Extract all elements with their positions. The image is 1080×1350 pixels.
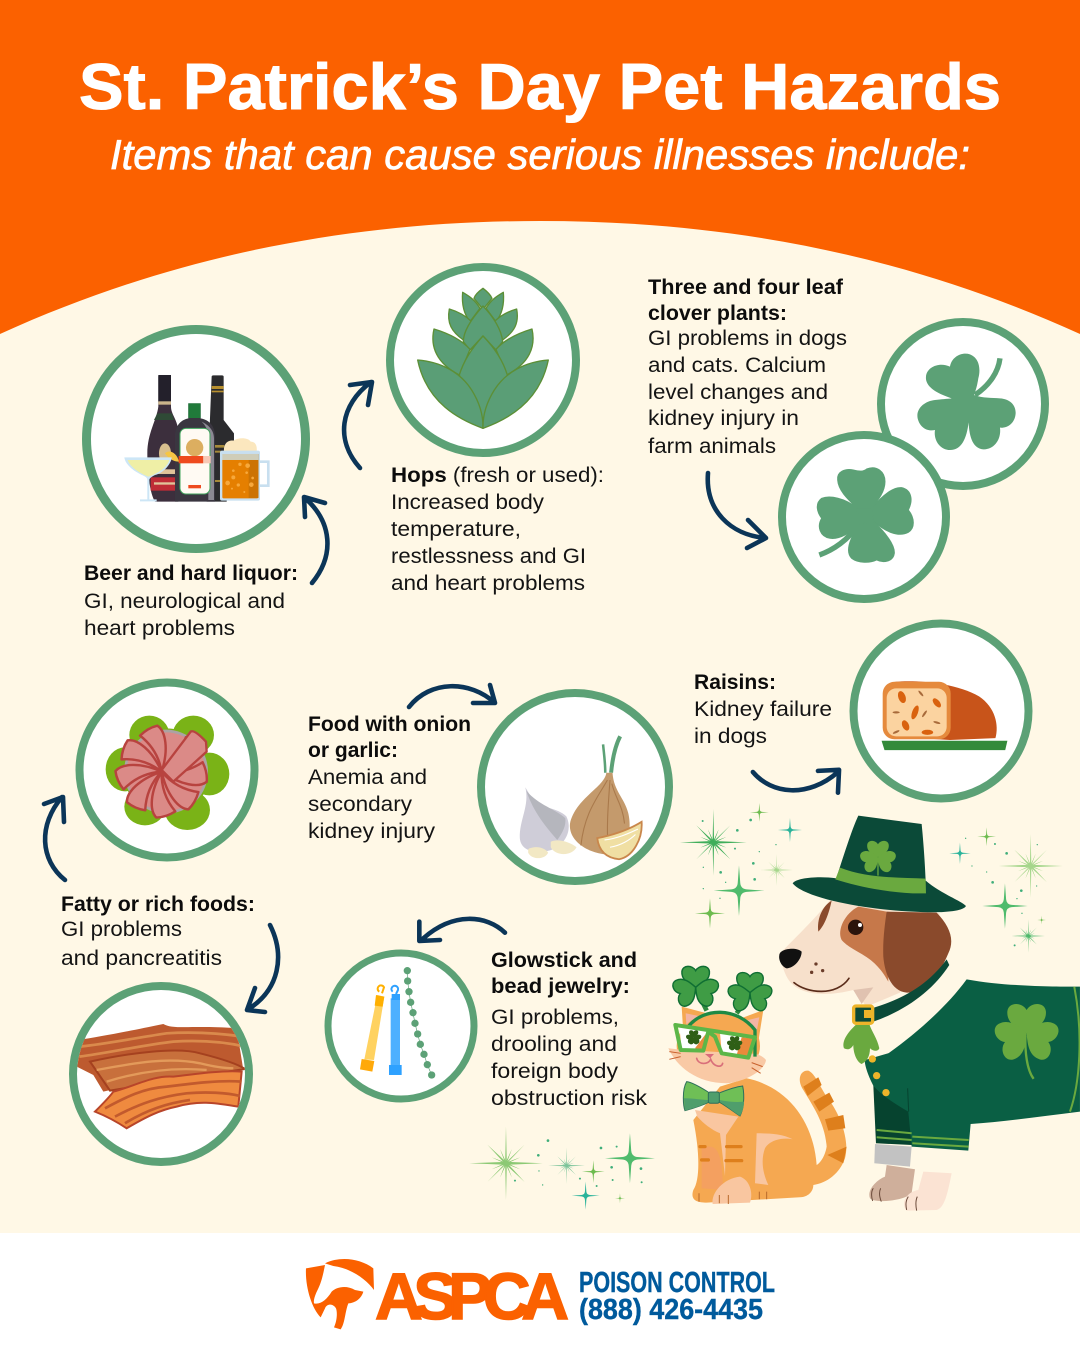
- dog paws and cuff: [869, 1144, 952, 1211]
- text: clover plants: GI problems in dogs: [648, 326, 847, 350]
- icon: four leaf clover in ring: [782, 435, 946, 599]
- logo: ASPCA shield: [306, 1259, 374, 1329]
- cat sunglasses: [675, 1025, 755, 1058]
- panel: hops: [390, 267, 604, 595]
- text: raisins: [694, 670, 832, 748]
- text: food with onion or garlic: secondary: [308, 792, 412, 816]
- poison control phone number: (888) 426-4435: [579, 1294, 763, 1326]
- text: fatty or rich foods: Fatty or rich foods:: [61, 892, 255, 916]
- text: hops: Increased body: [391, 490, 544, 514]
- panel: fatty foods, ham icon: [61, 682, 255, 1162]
- text: glowstick and bead jewelry: GI problems,: [491, 1005, 619, 1029]
- dog collar and ribbon: [843, 959, 949, 1064]
- text: raisins: in dogs: [694, 724, 767, 748]
- illustration: dog in leprechaun outfit: [779, 816, 1080, 1211]
- poison control name: POISON CONTROL: [579, 1267, 775, 1299]
- panel: onion or garlic: [308, 693, 669, 881]
- text: clover plants: and cats. Calcium: [648, 353, 826, 377]
- text: fatty or rich foods: GI problems: [61, 917, 182, 941]
- icon: three leaf clover in ring: [881, 322, 1045, 486]
- icon: bacon in ring: [73, 986, 249, 1162]
- text: fatty or rich foods: and pancreatitis: [61, 946, 222, 970]
- text: raisins: Kidney failure: [694, 697, 832, 721]
- text: food with onion or garlic: Food with onion: [308, 712, 471, 736]
- icon: hop cone in ring: [390, 267, 576, 453]
- text: fatty or rich foods: [61, 892, 255, 970]
- text: hops: temperature,: [391, 517, 521, 541]
- header: orange curved banner: [0, 0, 1080, 334]
- footer: white band with logo: [0, 1233, 1080, 1350]
- arrow: hops text to hops icon: [344, 382, 372, 468]
- arrow: clover text to clover icon: [708, 473, 766, 548]
- text: glowstick and bead jewelry: drooling and: [491, 1032, 617, 1056]
- panel: glowstick and bead jewelry: [328, 948, 647, 1110]
- text: hops: Hops (fresh or used):: [391, 463, 604, 487]
- text: beer and hard liquor: [84, 561, 298, 640]
- dog jacket: [865, 979, 1080, 1151]
- text: clover plants: [648, 275, 847, 458]
- arrow: onion text to onion icon: [409, 685, 495, 707]
- cat headband with shamrocks: [671, 966, 774, 1057]
- text: hops: [391, 463, 604, 595]
- text: raisins: Raisins:: [694, 670, 776, 694]
- icon: glowsticks and beads in ring: [328, 953, 474, 1099]
- text: food with onion or garlic: Anemia and: [308, 765, 427, 789]
- icon: bottles and drinks in ring: [86, 330, 306, 548]
- text: glowstick and bead jewelry: bead jewelry:: [491, 974, 630, 998]
- arrow: fatty foods text to ham icon: [44, 797, 65, 880]
- arrow: liquor text to liquor icon: [304, 497, 327, 583]
- text: glowstick and bead jewelry: Glowstick and: [491, 948, 637, 972]
- cat head: [668, 1007, 766, 1083]
- text: clover plants: farm animals: [648, 434, 776, 458]
- text: clover plants: kidney injury in: [648, 406, 799, 430]
- text: hops: restlessness and GI: [391, 544, 586, 568]
- text: clover plants: clover plants:: [648, 301, 787, 325]
- text: clover plants: Three and four leaf: [648, 275, 844, 299]
- text: glowstick and bead jewelry: obstruction risk: [491, 1086, 647, 1110]
- text: glowstick and bead jewelry: [491, 948, 647, 1110]
- text: food with onion or garlic: [308, 712, 471, 843]
- text: glowstick and bead jewelry: foreign body: [491, 1059, 618, 1083]
- text: beer and hard liquor: Beer and hard liquor:: [84, 561, 298, 585]
- text: beer and hard liquor: GI, neurological and: [84, 589, 285, 613]
- leprechaun hat: [793, 816, 966, 912]
- illustration: orange cat with shamrock headband: [668, 966, 847, 1204]
- text: beer and hard liquor: heart problems: [84, 616, 235, 640]
- icon: ham slices on lettuce in ring: [80, 682, 254, 858]
- icon: raisin bread in ring: [854, 624, 1028, 798]
- text: hops: and heart problems: [391, 571, 585, 595]
- panel: raisins: [694, 624, 1028, 798]
- subtitle: Items that can cause serious illnesses include:: [110, 131, 970, 178]
- title: St. Patrick’s Day Pet Hazards: [79, 50, 1001, 123]
- text: food with onion or garlic: kidney injury: [308, 819, 435, 843]
- arrow: glowstick text to glowstick icon: [419, 919, 505, 941]
- sparkles: lower centre: [469, 1126, 655, 1210]
- panel: clover plants: [648, 275, 1045, 599]
- icon: onion and garlic in ring: [481, 693, 669, 881]
- arrow: fatty foods text to bacon icon: [247, 925, 278, 1012]
- logo: ASPCA wordmark: ASPCA: [375, 1259, 569, 1333]
- text: food with onion or garlic: or garlic:: [308, 738, 398, 762]
- sparkles: around dog: [679, 803, 1063, 953]
- dog head: [779, 900, 951, 1007]
- cat body and tail: [692, 1071, 847, 1204]
- text: clover plants: level changes and: [648, 380, 828, 404]
- cat bow tie: [683, 1082, 744, 1116]
- arrow: raisins text to raisin icon: [753, 770, 839, 793]
- panel: beer and hard liquor: [84, 330, 306, 640]
